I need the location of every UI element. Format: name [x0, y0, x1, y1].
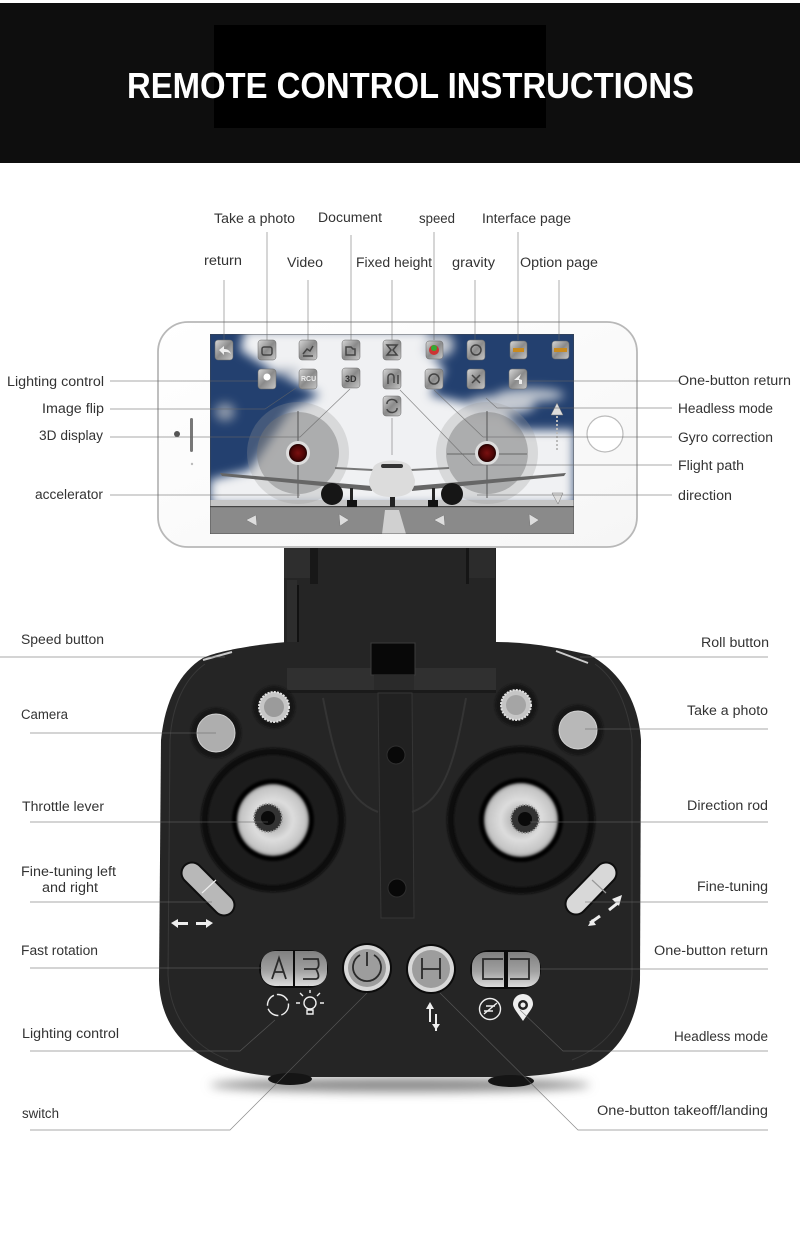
phone left labels: Lighting control: [7, 374, 104, 389]
right foot: [488, 1075, 534, 1087]
remote left labels: Camera: [21, 707, 68, 722]
left thumbwheel: [253, 686, 295, 728]
light bulb icon: [296, 990, 324, 1014]
remote right labels: Roll button: [701, 635, 769, 650]
phone: [158, 322, 637, 547]
camera button: [191, 708, 241, 758]
screen icons row two: RCU: [301, 376, 316, 383]
remote right labels: Headless mode: [674, 1029, 768, 1044]
right joystick: [447, 746, 595, 894]
screen arrows: [246, 403, 563, 526]
remote left labels: Speed button: [21, 632, 104, 647]
phone left labels: Image flip: [42, 401, 104, 416]
headless icon: [480, 998, 500, 1020]
remote left labels: [21, 632, 119, 1121]
remote right labels: Take a photo: [687, 703, 768, 718]
top labels: Document: [318, 210, 382, 225]
updown arrows icon: [426, 1002, 440, 1031]
remote leader lines: [0, 657, 768, 1130]
left trim button: [192, 873, 224, 905]
A B button: [259, 950, 328, 988]
remote shadow: [210, 1078, 590, 1092]
top labels: Video: [287, 255, 323, 270]
remote left labels: Throttle lever: [22, 799, 105, 814]
title: REMOTE CONTROL INSTRUCTIONS: [127, 65, 694, 106]
screen icons row two: [258, 368, 527, 389]
phone left labels: 3D display: [39, 428, 103, 443]
right thumbwheel: [495, 684, 537, 726]
phone right labels: One-button return: [678, 373, 791, 388]
phone leader lines: [110, 232, 680, 495]
right trim button: [576, 873, 606, 904]
remote left labels: switch: [22, 1106, 59, 1121]
remote left labels: Fast rotation: [21, 943, 98, 958]
joystick left: [247, 402, 349, 504]
remote right labels: One-button takeoff/landing: [597, 1103, 768, 1118]
phone left labels: accelerator: [35, 487, 103, 502]
left trim arrows: [171, 919, 213, 928]
photo button: [553, 705, 603, 755]
rotation icon: [268, 994, 288, 1016]
H button: [406, 944, 456, 994]
left foot: [268, 1073, 312, 1085]
runway: [210, 500, 574, 534]
phone screen: [210, 330, 574, 534]
top labels: Take a photo: [214, 211, 295, 226]
power button: [342, 943, 392, 993]
remote right labels: [597, 635, 769, 1118]
holder clamp: [287, 643, 496, 693]
airplane: [220, 460, 566, 507]
phone right labels: Headless mode: [678, 401, 773, 416]
top labels: gravity: [452, 255, 495, 270]
header band: [0, 3, 800, 163]
remote right labels: Direction rod: [687, 798, 768, 813]
top labels: Fixed height: [356, 255, 432, 270]
top labels: Option page: [520, 255, 598, 270]
top labels: Interface page: [482, 211, 571, 226]
phone right labels: Gyro correction: [678, 430, 773, 445]
top labels: speed: [419, 211, 455, 226]
remote right labels: One-button return: [654, 943, 768, 958]
phone right labels: Flight path: [678, 458, 744, 473]
remote left labels: and right: [42, 880, 98, 895]
remote control body: [159, 642, 641, 1087]
phone left labels: [7, 374, 104, 502]
phone right labels: [678, 373, 791, 503]
phone holder: [284, 548, 496, 693]
screen icons row one: [215, 340, 569, 360]
right trim arrows: [588, 895, 622, 926]
left joystick: [201, 748, 345, 892]
C D button: [470, 950, 541, 989]
remote right labels: Fine-tuning: [697, 879, 768, 894]
remote left labels: Lighting control: [22, 1026, 119, 1041]
remote left labels: Fine-tuning left: [21, 864, 116, 879]
top labels: [204, 210, 598, 270]
joystick right: [436, 402, 538, 504]
top labels: return: [204, 253, 242, 268]
location pin icon: [513, 994, 533, 1021]
screen icons row two: 3D: [345, 374, 357, 384]
phone right labels: direction: [678, 488, 732, 503]
center stand: [323, 693, 466, 918]
screen icon row three: [383, 396, 401, 416]
